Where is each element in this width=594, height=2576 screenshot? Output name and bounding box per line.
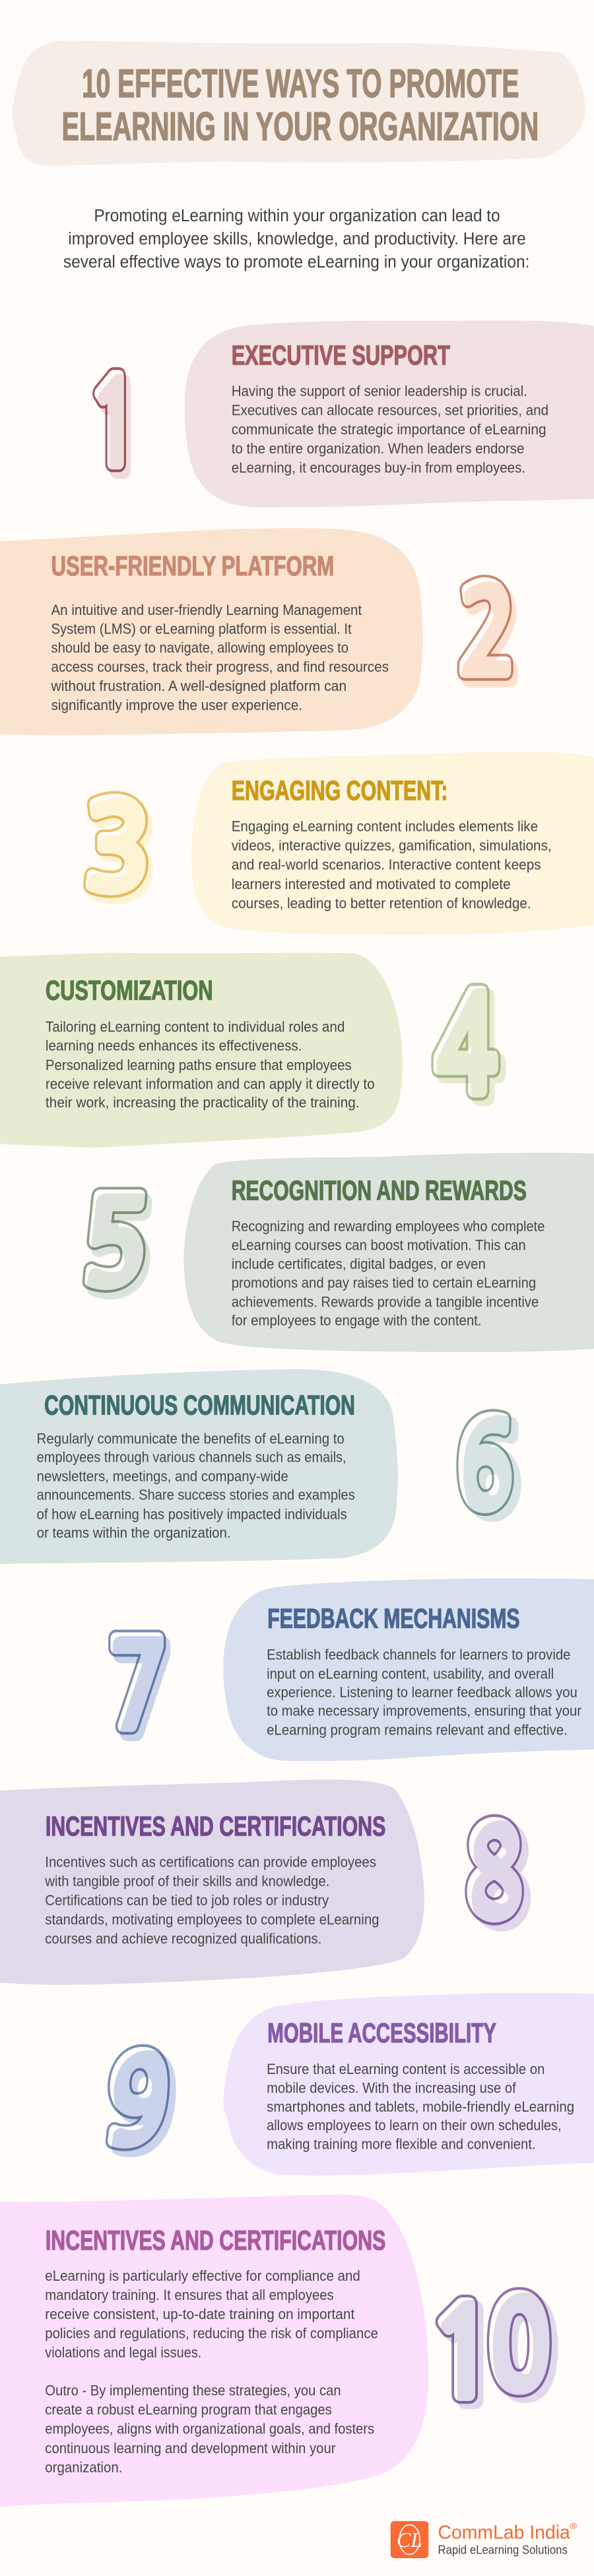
number 7: 7 [108,1628,167,1745]
number 10 [428,2285,556,2419]
number 10: 1 [428,2292,496,2414]
logo tagline: Rapid eLearning Solutions [438,2543,568,2557]
body 6 [37,1431,355,1541]
body 10: employees, aligns with organizational goals, and fosters [45,2421,374,2437]
heading 6: CONTINUOUS COMMUNICATION [44,1390,355,1421]
body 2 [51,602,389,714]
panel 7 background [223,1578,594,1761]
registered mark: ® [570,2521,578,2530]
number 10: 0 [488,2285,550,2408]
body 8: courses and achieve recognized qualifications. [45,1931,321,1947]
section 2: user-friendly platform [0,528,521,735]
number 7: 7 [113,1634,172,1752]
number 3: 3 [84,789,150,907]
section 3: engaging content [84,752,594,935]
number 7: 7 [108,1628,167,1745]
number 6: 6 [456,1408,513,1526]
number 6: 6 [456,1408,513,1526]
panel 1 background [185,320,594,507]
number 2: 2 [457,574,516,691]
number 9: 9 [108,2049,180,2166]
number 4: 4 [440,985,502,1117]
body 8: with tangible proof of their skills and knowledge. [44,1873,329,1890]
intro text: several effective ways to promote eLearning in your organization: [63,252,529,271]
section 9: mobile accessibility [102,1993,594,2176]
body 6: Regularly communicate the benefits of eLearning to [37,1431,345,1447]
body 10: Outro - By implementing these strategies, you can [45,2382,341,2399]
panel 5 background [183,1153,594,1352]
body 8: Incentives such as certifications can provide employees [45,1854,376,1871]
body 3 [232,818,552,912]
number 10: 0 [494,2291,556,2413]
body 1: Having the support of senior leadership is crucial. [232,383,527,400]
heading 10: INCENTIVES AND CERTIFICATIONS [46,2225,385,2256]
body 10: organization. [45,2459,122,2476]
body 8: Certifications can be tied to job roles or industry [45,1892,329,1909]
panel 4 background [0,952,403,1148]
body 4: their work, increasing the practicality of the training. [46,1094,360,1111]
body 2: An intuitive and user-friendly Learning Management [51,602,362,619]
body 2: should be easy to navigate, allowing employees to [51,639,348,657]
section 5: recognition and rewards [77,1153,594,1352]
body 5: include certificates, digital badges, or even [232,1256,486,1273]
body 6: announcements. Share success stories and examples [37,1487,355,1503]
body 9: making training more flexible and convenient. [267,2136,536,2153]
heading 1: EXECUTIVE SUPPORT [232,340,450,371]
section 6: continuous communication [0,1369,520,1564]
body 10: continuous learning and development within your [45,2440,336,2456]
number 8: 8 [473,1819,529,1941]
body 2: without frustration. A well-designed platform can [51,678,346,694]
number 4: 4 [435,980,497,1112]
body 6: employees through various channels such as emails, [37,1449,346,1466]
heading 4: CUSTOMIZATION [46,976,213,1006]
number 9: 9 [102,2042,174,2160]
body 8: standards, motivating employees to complete eLearning [45,1912,380,1928]
section 1: executive support [86,320,594,507]
body 4: Personalized learning paths ensure that employees [46,1057,352,1073]
body 1: eLearning, it encourages buy-in from employees. [232,460,525,476]
panel 3 background [191,752,594,935]
section 8: incentives and certifications [0,1779,529,1985]
number 1: 1 [91,371,145,489]
number 10: 1 [428,2292,496,2414]
panel 10 background [0,2194,428,2507]
body 2: access courses, track their progress, and find resources [51,659,389,676]
number 1: 1 [86,365,141,482]
body 6: or teams within the organization. [37,1524,231,1541]
header section [13,40,585,271]
number 8: 8 [466,1813,522,1935]
logo: CommLab India [391,2521,578,2558]
number 1: 1 [86,365,141,482]
number 6: 6 [463,1414,520,1532]
number 2: 2 [457,574,516,691]
number 10: 0 [488,2285,550,2408]
body 10: create a robust eLearning program that engages [45,2402,332,2418]
body 6: newsletters, meetings, and company-wide [37,1468,288,1485]
body 1: to the entire organization. When leaders endorse [232,441,524,457]
number 8: 8 [466,1813,522,1935]
logo mark [391,2521,428,2558]
number 3: 3 [88,796,155,913]
body 10: receive consistent, up-to-date training on important [45,2306,355,2323]
panel 9 background [223,1993,594,2176]
body 7 [267,1647,581,1738]
body 1 [232,383,548,476]
body 4: Tailoring eLearning content to individual roles and [46,1019,345,1036]
body 9 [267,2061,574,2153]
number 9: 9 [102,2042,174,2160]
number 3: 3 [84,789,150,907]
body 10: violations and legal issues. [45,2344,201,2361]
panel 2 background [0,528,422,735]
body 4 [46,1019,375,1111]
body 5: eLearning courses can boost motivation. This can [232,1237,526,1254]
number 4: 4 [435,980,497,1112]
section 7: feedback mechanisms [108,1578,594,1761]
heading 8: INCENTIVES AND CERTIFICATIONS [46,1811,385,1842]
body 8 [44,1854,380,1947]
title panel [13,40,585,166]
heading 3: ENGAGING CONTENT: [232,775,447,806]
body 2: System (LMS) or eLearning platform is essential. It [51,621,352,637]
body 5: for employees to engage with the content. [232,1312,482,1329]
body 4: receive relevant information and can apply it directly to [46,1076,375,1092]
body 9: mobile devices. With the increasing use of [267,2080,516,2096]
body 10: mandatory training. It ensures that all employees [45,2287,334,2304]
number 5: 5 [77,1184,152,1302]
body 4: learning needs enhances its effectiveness. [46,1038,302,1054]
number 5: 5 [77,1184,152,1302]
body 5 [232,1218,544,1329]
section 10: incentives and certifications [0,2194,578,2558]
logo: CommLab India: CL [397,2529,422,2552]
panel 8 background [0,1779,424,1985]
section 4: customization [0,952,502,1148]
body 3: learners interested and motivated to complete [232,876,511,892]
title [62,61,539,149]
body 10: eLearning is particularly effective for compliance and [45,2268,360,2285]
body 3: courses, leading to better retention of knowledge. [232,895,531,912]
body 10: policies and regulations, reducing the risk of compliance [45,2325,378,2342]
body 2: significantly improve the user experience. [51,697,302,714]
logo name: CommLab India [438,2522,570,2543]
intro text: improved employee skills, knowledge, and productivity. Here are [68,229,526,248]
body 10 [45,2268,378,2476]
heading 2: USER-FRIENDLY PLATFORM [51,551,334,581]
number 2: 2 [462,581,521,698]
panel 6 background [0,1369,398,1564]
intro text [63,206,529,271]
number 5: 5 [81,1191,157,1309]
number 10: 1 [434,2297,502,2419]
intro text: Promoting eLearning within your organization can lead to [94,206,500,225]
body 6: of how eLearning has positively impacted individuals [37,1506,347,1522]
